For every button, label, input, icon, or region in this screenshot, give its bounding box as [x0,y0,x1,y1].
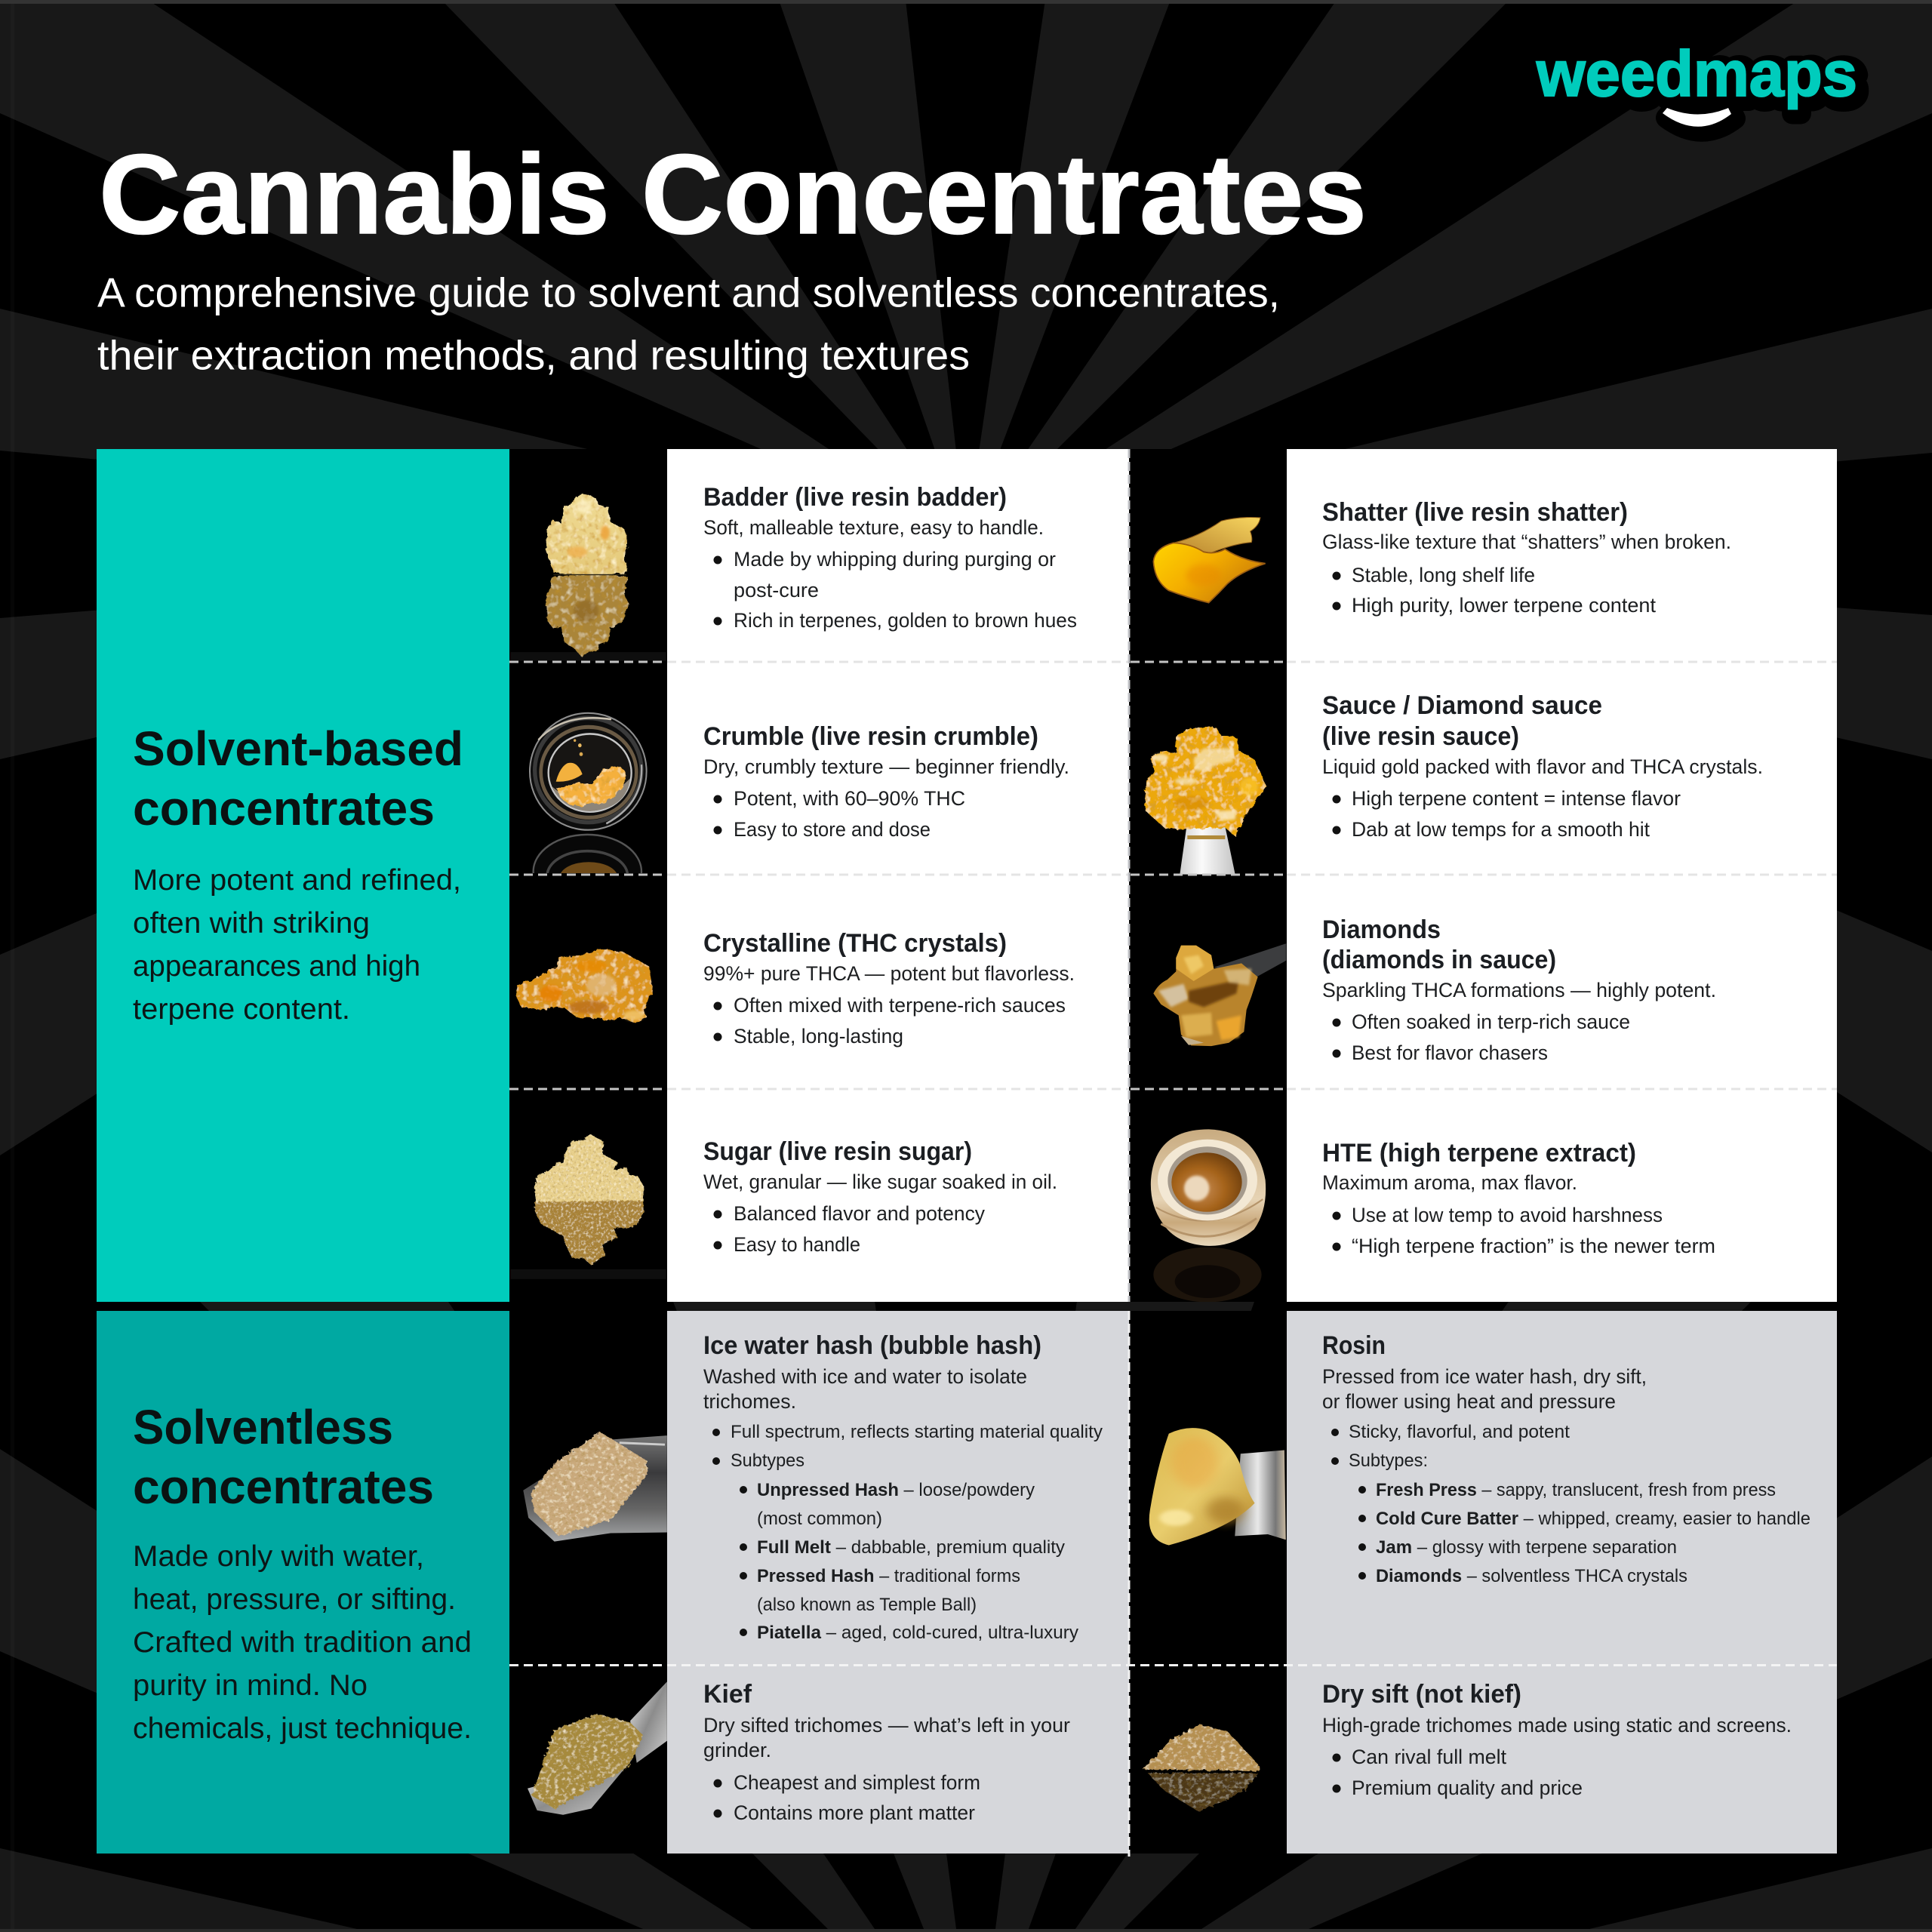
subtitle [97,269,1280,379]
card: ice water hash: trichomes. [703,1390,796,1413]
card: sugar: Wet, granular — like sugar soaked in oil. [703,1171,1057,1193]
card: badder: Badder (live resin badder) [703,483,1007,512]
subtitle: A comprehensive guide to solvent and solventless concentrates, [97,269,1280,315]
image column backgrounds [509,449,1287,1854]
logo: weedmaps: weedmaps [1536,38,1857,110]
description: solventless: heat, pressure, or sifting. [133,1583,456,1616]
card: dry sift: Can rival full melt [1352,1746,1507,1768]
card: diamonds: Best for flavor chasers [1352,1041,1548,1064]
photo: shatter [1153,517,1266,603]
panel: solventless concentrates [133,1400,472,1745]
photo: high terpene extract jar [1151,1129,1266,1302]
card: crumble: Easy to store and dose [734,818,931,841]
card: HTE [1322,1139,1715,1257]
card: sauce: (live resin sauce) [1322,722,1519,751]
photo: crumble in glass jar [529,712,648,873]
card: rosin: Rosin [1322,1331,1386,1360]
card: ice water hash: Subtypes [731,1451,804,1471]
photo: rosin on glass [1149,1428,1286,1545]
card: kief: Dry sifted trichomes — what’s left in your [703,1714,1070,1737]
panel: solvent-based concentrates [133,721,463,1026]
description: solvent-based: appearances and high [133,950,420,983]
card: ice water hash: Washed with ice and water to isolate [703,1365,1027,1388]
card: sugar: Balanced flavor and potency [734,1202,986,1225]
photo: dry sift [1143,1724,1260,1812]
card: crystalline: 99%+ pure THCA — potent but flavorless. [703,962,1075,985]
card: ice water hash: Full spectrum, reflects starting material quality [731,1422,1103,1442]
card: ice water hash: (most common) [757,1509,882,1529]
card: diamonds: Diamonds [1322,915,1441,944]
description: solventless: purity in mind. No [133,1669,368,1702]
card: crystalline: Stable, long-lasting [734,1025,903,1048]
card: ice water hash: Piatella – aged, cold-cured, ultra-luxury [757,1623,1078,1643]
card: sugar: Sugar (live resin sugar) [703,1137,972,1166]
panels [97,449,1837,1854]
card: sauce: Dab at low temps for a smooth hit [1352,818,1651,841]
card: badder [703,483,1077,632]
card: rosin: Sticky, flavorful, and potent [1349,1422,1570,1442]
card: kief: grinder. [703,1739,771,1761]
heading: solventless [133,1400,434,1514]
card: rosin: Diamonds – solventless THCA crystals [1376,1566,1687,1586]
card: sugar [703,1137,1057,1256]
photo: kief on spoon [528,1681,667,1815]
card: crystalline: Often mixed with terpene-rich sauces [734,994,1066,1017]
heading: solventless: concentrates [133,1460,434,1514]
card: kief [703,1680,1070,1824]
card: HTE: Use at low temp to avoid harshness [1352,1204,1663,1226]
card: diamonds: (diamonds in sauce) [1322,946,1556,974]
card: rosin: Fresh Press – sappy, translucent, fresh from press [1376,1480,1776,1500]
description: solvent-based [133,864,461,1026]
card: crumble: Potent, with 60–90% THC [734,787,965,810]
card: sauce: Liquid gold packed with flavor and THCA crystals. [1322,755,1763,778]
card: crumble [703,722,1069,841]
heading: solvent-based [133,721,463,835]
description: solvent-based: More potent and refined, [133,864,461,897]
card: rosin: Cold Cure Batter – whipped, creamy, easier to handle [1376,1509,1810,1529]
heading: solvent-based: Solvent-based [133,721,463,776]
card: ice water hash [703,1331,1103,1643]
card: shatter: Glass-like texture that “shatters” when broken. [1322,531,1731,553]
photo: diamonds on dab tool [1153,943,1286,1046]
card: crumble: Crumble (live resin crumble) [703,722,1038,751]
card: HTE: “High terpene fraction” is the newer term [1352,1235,1715,1257]
card: ice water hash: Full Melt – dabbable, premium quality [757,1537,1065,1558]
heading: solvent-based: concentrates [133,781,435,835]
card: kief: Kief [703,1680,752,1709]
card: dry sift: Dry sift (not kief) [1322,1680,1521,1709]
description: solventless [133,1540,472,1745]
card: rosin [1322,1331,1810,1586]
logo: weedmaps: weedmaps [1540,43,1861,115]
card: sauce [1322,691,1763,841]
card: dry sift: Premium quality and price [1352,1777,1583,1799]
card: sauce: Sauce / Diamond sauce [1322,691,1602,720]
card: sugar: Easy to handle [734,1233,860,1256]
card: rosin: Subtypes: [1349,1451,1428,1471]
card: ice water hash: (also known as Temple Ball) [757,1595,977,1615]
card: kief: Contains more plant matter [734,1801,975,1824]
card: kief: Cheapest and simplest form [734,1771,980,1794]
card: shatter [1322,498,1731,617]
card: diamonds: Often soaked in terp-rich sauce [1352,1011,1630,1033]
description: solventless: Made only with water, [133,1540,424,1573]
card: diamonds: Sparkling THCA formations — highly potent. [1322,979,1716,1001]
card: badder: Rich in terpenes, golden to brown hues [734,609,1077,632]
card: diamonds [1322,915,1716,1064]
card: rosin: Jam – glossy with terpene separation [1376,1537,1677,1558]
photo: sugar [510,1134,666,1279]
heading: solventless: Solventless [133,1400,393,1454]
card: shatter: Shatter (live resin shatter) [1322,498,1628,527]
photo: ice water hash on glass [523,1432,667,1542]
card: crumble: Dry, crumbly texture — beginner friendly. [703,755,1069,778]
card: badder: Soft, malleable texture, easy to handle. [703,516,1044,539]
card: shatter: High purity, lower terpene content [1352,594,1657,617]
subtitle: their extraction methods, and resulting textures [97,332,970,379]
photo: sauce on glass stand [1145,728,1266,875]
card: rosin: or flower using heat and pressure [1322,1390,1616,1413]
title: Cannabis Concentrates [99,131,1367,257]
card: HTE: HTE (high terpene extract) [1322,1139,1636,1168]
card: ice water hash: Unpressed Hash – loose/powdery [757,1480,1035,1500]
card: crystalline [703,929,1075,1048]
photo: badder [510,493,666,661]
card: ice water hash: Ice water hash (bubble hash) [703,1331,1041,1360]
description: solvent-based: often with striking [133,907,370,940]
card: badder: Made by whipping during purging or [734,548,1056,571]
description: solventless: Crafted with tradition and [133,1626,472,1659]
card: crystalline: Crystalline (THC crystals) [703,929,1007,958]
card: dry sift: High-grade trichomes made using static and screens. [1322,1714,1792,1737]
card: badder: post-cure [734,579,819,601]
photo: crystalline [516,949,653,1023]
description: solvent-based: terpene content. [133,993,350,1026]
card: rosin: Pressed from ice water hash, dry sift, [1322,1365,1647,1388]
card: sauce: High terpene content = intense flavor [1352,787,1681,810]
description: solventless: chemicals, just technique. [133,1712,472,1745]
card: HTE: Maximum aroma, max flavor. [1322,1171,1577,1194]
card: ice water hash: Pressed Hash – traditional forms [757,1566,1020,1586]
card: dry sift [1322,1680,1792,1799]
card: shatter: Stable, long shelf life [1352,564,1535,586]
